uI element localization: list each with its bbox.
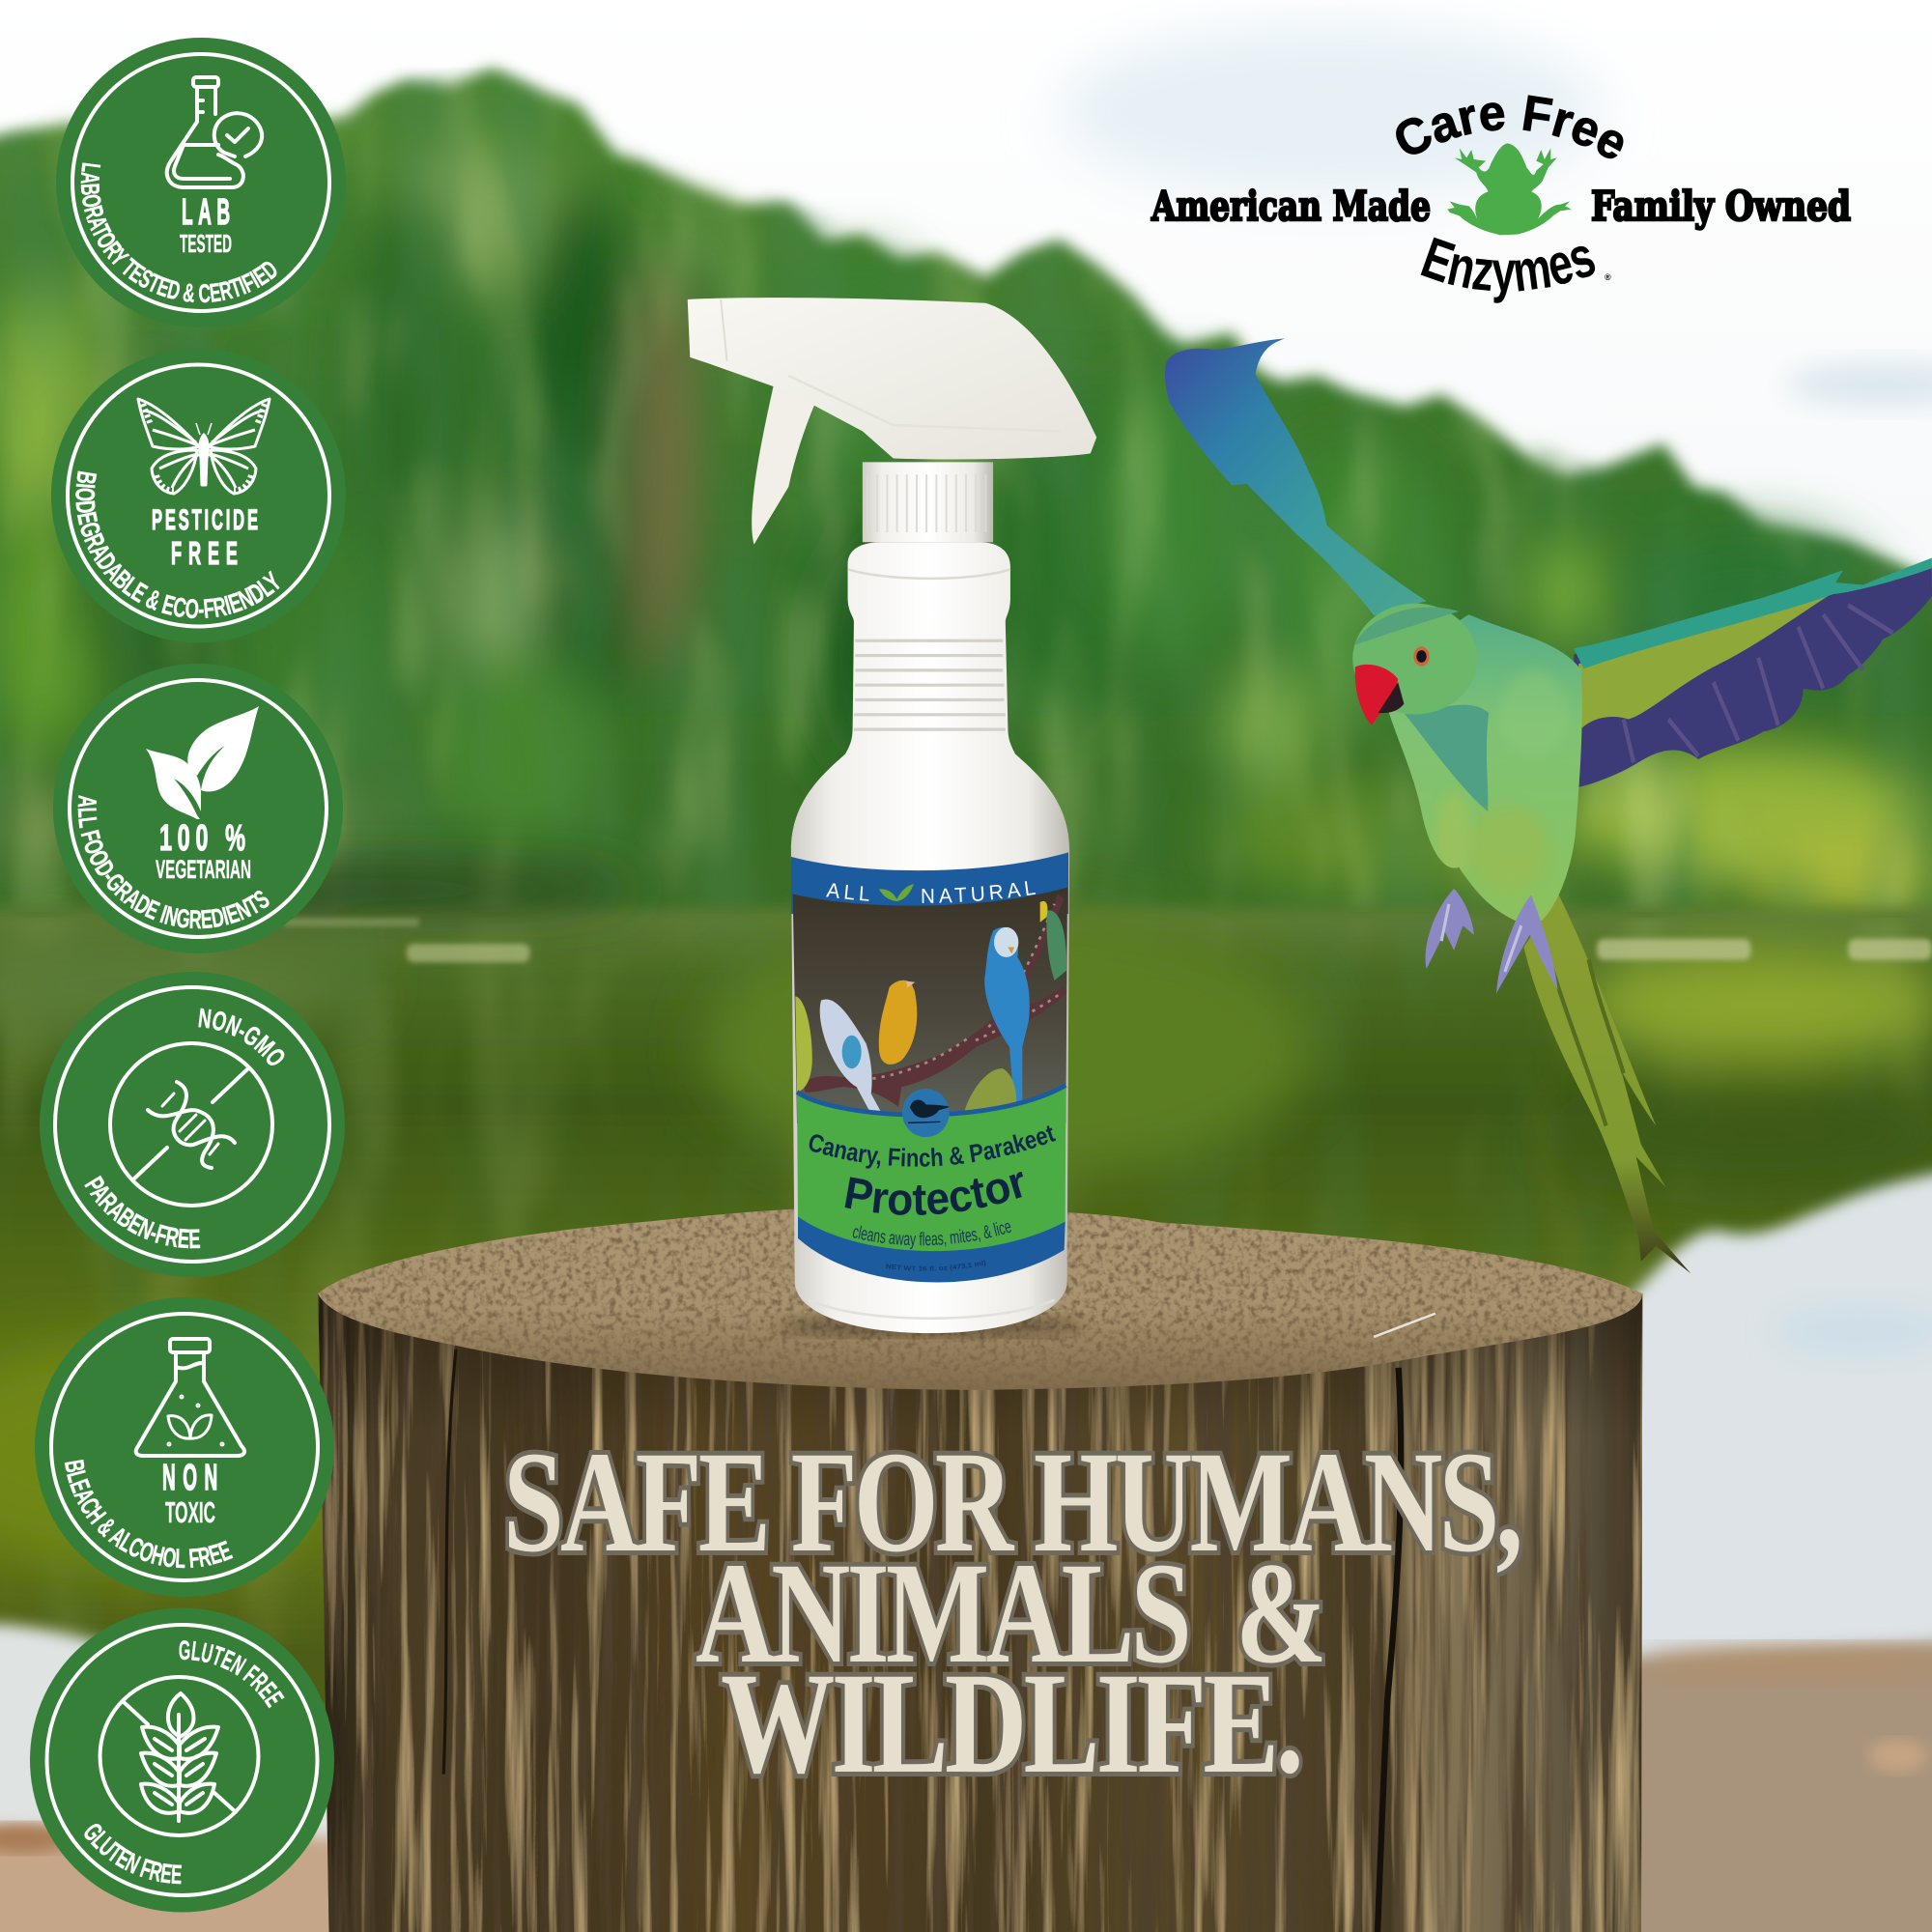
label text <box>805 876 1059 1273</box>
badge: pesticide free <box>51 348 346 643</box>
icon: two leaves <box>146 706 259 819</box>
badge: non-GMO paraben-free <box>40 972 345 1277</box>
icon: lab flask with check <box>167 77 262 187</box>
text: GLUTEN FREE, twice: GLUTEN FREE <box>84 1824 182 1884</box>
label green panel <box>797 1087 1065 1252</box>
text: PESTICIDE FREE: FREE <box>171 535 244 571</box>
icon: crossed wheat <box>124 1693 235 1821</box>
headline line 2: ANIMALS & <box>696 1533 1323 1693</box>
label leaf mark <box>879 884 914 901</box>
text: GLUTEN FREE, twice <box>77 1635 290 1889</box>
parrot upper wing <box>1165 338 1427 615</box>
icon: butterfly <box>138 399 270 494</box>
text: 100% VEGETARIAN: ALL FOOD-GRADE INGREDIENTS <box>77 795 270 929</box>
headline line 1: SAFE FOR HUMANS, <box>503 1422 1520 1582</box>
bottle label <box>791 852 1068 1283</box>
badge: gluten free <box>30 1607 334 1913</box>
label bottom blue band <box>798 1216 1065 1283</box>
label text: Canary, Finch & Parakeet <box>810 1125 1057 1169</box>
text: PESTICIDE FREE: PESTICIDE <box>152 504 261 536</box>
badge: lab tested <box>56 38 346 327</box>
registered mark: ® <box>1605 272 1611 282</box>
label bird photo <box>793 888 1067 1123</box>
logo text: American Made: American Made <box>1151 183 1431 230</box>
logo frog icon <box>1447 143 1572 235</box>
label text: ALL NATURAL <box>826 881 1036 903</box>
parrot beak <box>1355 665 1398 725</box>
label blue top band <box>791 852 1068 914</box>
text: NON-GMO, PARABEN-FREE <box>79 1003 292 1254</box>
label text: NET WT 16 fl. oz (473.1 ml) <box>886 1260 985 1271</box>
label bird emblem <box>902 1089 950 1137</box>
badge: non toxic <box>35 1297 334 1597</box>
headline line 3: WILDLIFE. <box>721 1643 1300 1804</box>
badge: 100% vegetarian <box>53 664 343 953</box>
parrot tail <box>1523 895 1690 1274</box>
logo text: Family Owned: Family Owned <box>1591 183 1851 230</box>
text: PESTICIDE FREE: BIODEGRADABLE & ECO-FRIENDLY <box>75 471 280 618</box>
parrot eye <box>1413 646 1430 667</box>
logo text: Enzymes: Enzymes <box>1420 238 1596 303</box>
bottle body and cap <box>777 462 1084 1337</box>
text: NON TOXIC: TOXIC <box>165 1495 215 1529</box>
text: GLUTEN FREE, twice: GLUTEN FREE <box>179 1640 285 1708</box>
text: LAB TESTED: LABORATORY TESTED & CERTIFIED <box>81 162 276 303</box>
trigger sprayer head <box>688 298 1096 545</box>
icon: flask with leaves <box>136 1339 244 1456</box>
text: NON TOXIC: BLEACH & ALCOHOL FREE <box>64 1459 234 1569</box>
text: NON-GMO, PARABEN-FREE: NON-GMO <box>198 1009 284 1065</box>
parrot head <box>1352 604 1477 714</box>
logo text: Care Free: Care Free <box>1396 95 1623 158</box>
text: 100% VEGETARIAN: VEGETARIAN <box>156 855 251 884</box>
label text: cleans away fleas, mites, & lice <box>852 1222 1011 1249</box>
icon: crossed DNA helix <box>133 1068 248 1179</box>
parrot body <box>1389 614 1582 925</box>
text: 100% VEGETARIAN: 100 % <box>159 816 251 858</box>
tree stump <box>318 1208 1642 1932</box>
text: NON TOXIC: NON <box>162 1458 225 1498</box>
logo: Care Free Enzymes <box>1151 85 1851 304</box>
text: LAB TESTED: LAB <box>182 192 236 233</box>
label text: Protector <box>844 1172 1023 1215</box>
text: LAB TESTED: TESTED <box>180 229 232 258</box>
parrot in flight <box>1165 338 1932 1274</box>
parrot right wing <box>1574 557 1932 787</box>
headline <box>503 1422 1520 1804</box>
product: spray bottle <box>688 298 1096 1337</box>
text: NON-GMO, PARABEN-FREE: PARABEN-FREE <box>84 1175 201 1248</box>
parrot feet <box>1426 889 1558 993</box>
